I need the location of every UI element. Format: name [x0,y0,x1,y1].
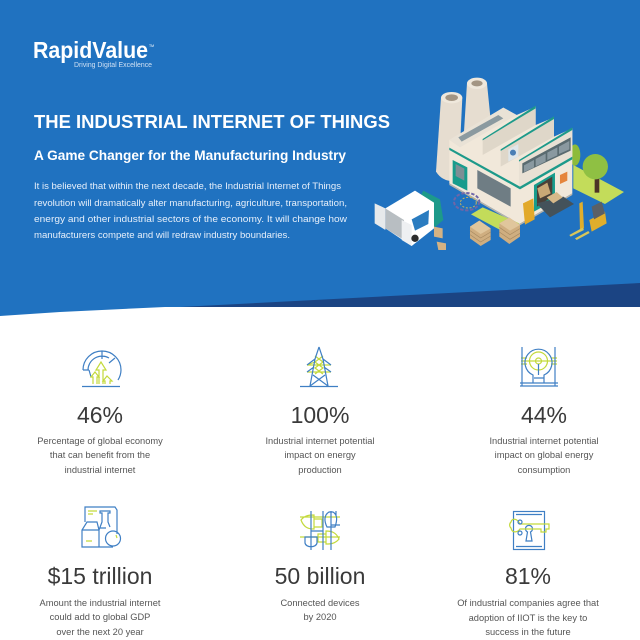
description: could add to global GDP [50,612,150,622]
intro text: energy and other industrial sectors of the economy. It will change how [34,214,347,225]
chimneys [436,78,491,181]
description: adoption of IIOT is the key to [469,613,587,623]
stat: $15 trillion: $15 trillion [48,563,152,589]
icon: interlocked hands [300,511,340,550]
intro text: manufacturers compete and will redraw industry boundaries. [34,230,290,241]
description: Industrial internet potential [489,436,599,446]
description: Of industrial companies agree that [457,598,599,608]
stat: 81% [457,512,599,637]
icon: key and keyhole [510,512,549,550]
truck [375,191,446,250]
description [457,598,599,637]
factory illustration [375,78,624,250]
description: impact on energy [284,450,356,460]
intro text: It is believed that within the next decade, the Industrial Internet of Things [34,181,341,192]
stat: $15 trillion [40,507,161,637]
loading dock [523,183,574,225]
description: success in the future [485,627,571,637]
stat: 46%: 46% [77,402,123,428]
description: production [298,465,342,475]
description: industrial internet [65,465,136,475]
description: Amount the industrial internet [40,598,161,608]
description: Industrial internet potential [265,436,375,446]
description [489,436,599,475]
logo: Driving Digital Excellence [74,62,152,69]
description: Percentage of global economy [37,436,163,446]
stat: 44%: 44% [521,402,567,428]
building [449,106,572,226]
description: by 2020 [303,612,337,622]
logo: RapidValue [33,37,148,63]
pallets [470,218,520,246]
description [265,436,375,475]
forklift [569,202,607,240]
icon: packaged goods [82,507,120,547]
description: that can benefit from the [50,450,150,460]
description: impact on global energy [495,450,594,460]
description: Connected devices [280,598,360,608]
title: THE INDUSTRIAL INTERNET OF THINGS [34,111,390,132]
icon: light bulb [520,347,558,386]
icon: radar with arrows [82,351,121,386]
description: over the next 20 year [56,627,144,637]
subtitle: A Game Changer for the Manufacturing Industry [34,148,347,163]
intro text [34,181,347,241]
icon: transmission tower [300,347,338,386]
lawn and tree [570,144,624,204]
stat: 44% [489,347,599,475]
intro text: revolution will dramatically alter manufacturing, agriculture, transportation, [34,198,347,209]
stat: 50 billion [275,511,365,622]
stat: 81%: 81% [505,563,551,589]
stat: 50 billion: 50 billion [275,563,365,589]
description [37,436,163,475]
logo: TM [149,44,154,48]
stat: 100% [265,347,375,475]
description [280,598,360,622]
description: consumption [518,465,570,475]
stat: 100%: 100% [291,402,349,428]
description [40,598,161,637]
stat: 46% [37,351,163,475]
green pad and cable bundle [454,193,519,232]
